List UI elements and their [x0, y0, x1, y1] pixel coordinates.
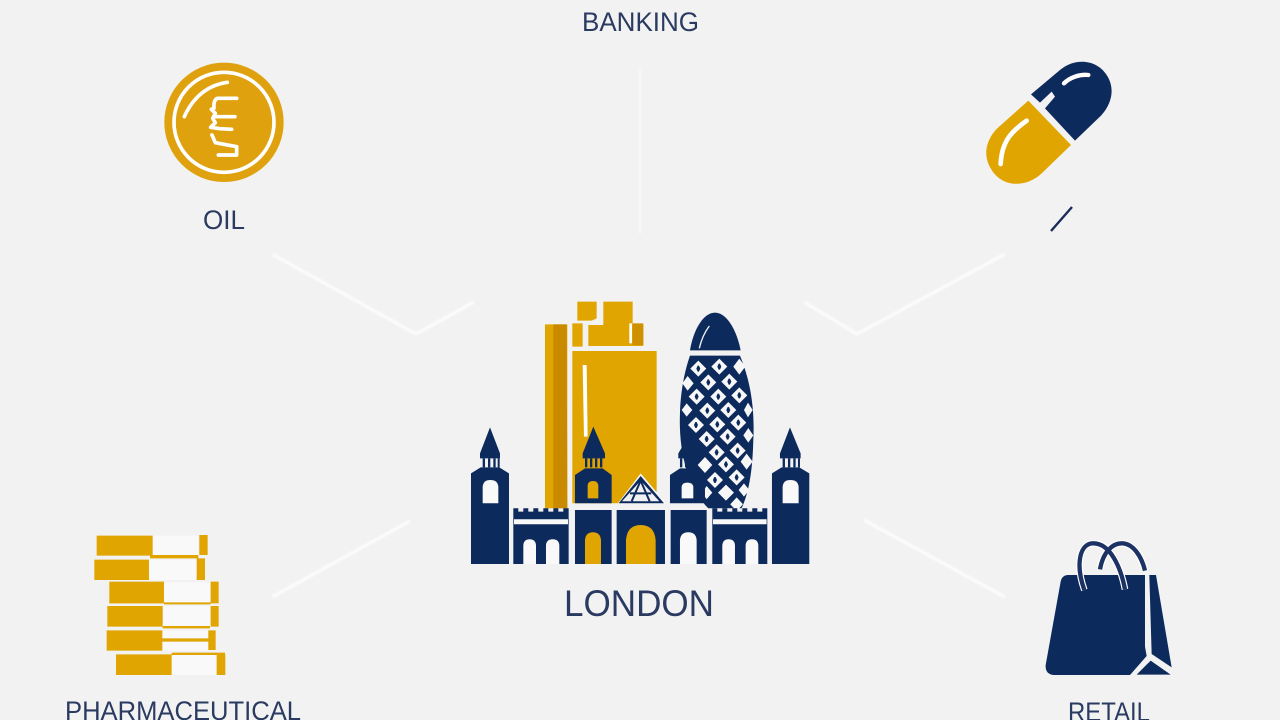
- icon: capsule: [986, 62, 1112, 184]
- heading: banking: BANKING: [582, 7, 699, 37]
- clock towers and gatehouses: [471, 427, 809, 564]
- gherkin tower: [680, 313, 754, 511]
- label: london: LONDON: [564, 583, 714, 624]
- label: oil: OIL: [203, 205, 245, 235]
- windows and arches: [483, 480, 799, 564]
- gold office tower: [545, 302, 657, 508]
- icon: coin: [164, 63, 284, 182]
- icon: stack of books: [94, 535, 225, 675]
- central gable: [617, 473, 667, 504]
- icon: london skyline: [471, 302, 809, 564]
- connector lines: [272, 66, 1005, 597]
- icon: shopping bag: [1046, 543, 1172, 675]
- label mark: slash under capsule: [1051, 207, 1072, 231]
